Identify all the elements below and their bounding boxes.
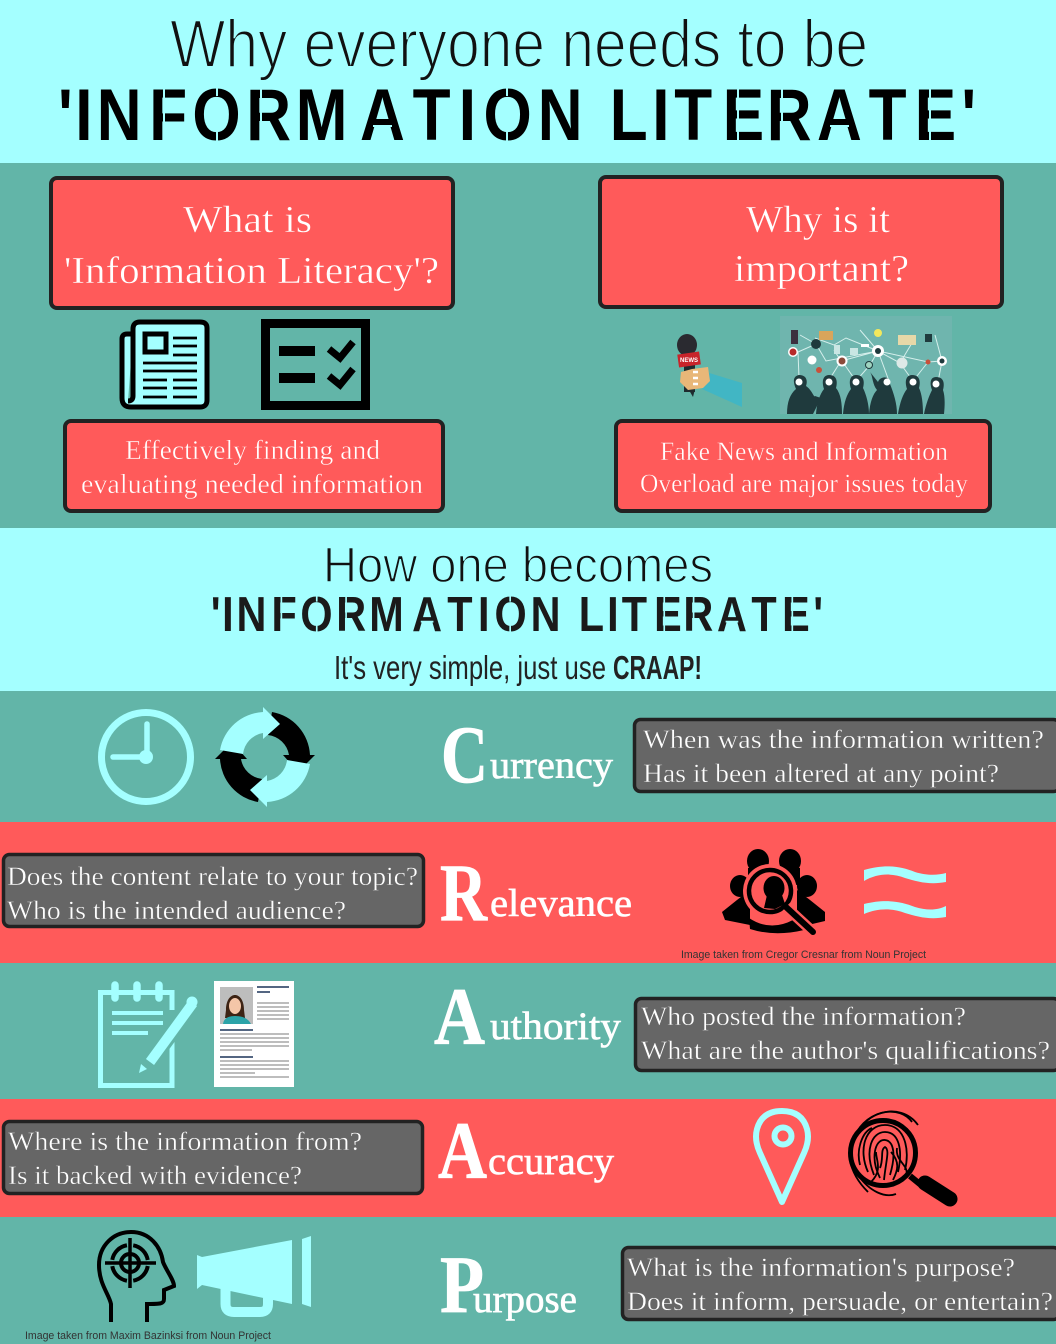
- credit: noun project: Image taken from Maxim Bazinksi from Noun Project: [25, 1330, 271, 1342]
- icon: location pin: [756, 1111, 808, 1202]
- heading: accuracy: ccuracy: [488, 1140, 615, 1183]
- credit: noun project: Image taken from Cregor Cresnar from Noun Project: [681, 949, 926, 961]
- heading: relevance: elevance: [490, 882, 632, 925]
- heading: accuracy: A: [438, 1105, 487, 1196]
- panel: fake news: [616, 421, 990, 511]
- callout: relevance questions: [4, 854, 424, 926]
- band: accuracy row background: [0, 1099, 1056, 1217]
- panel: fake news: Fake News and Information: [660, 437, 948, 466]
- heading: how one becomes: It's very simple, just use: [334, 649, 606, 686]
- callout: currency questions: When was the information written?: [643, 725, 1044, 754]
- icon: notepad and pencil: [100, 985, 198, 1086]
- heading: how one becomes: CRAAP!: [613, 649, 702, 686]
- callout: relevance questions: Does the content relate to your topic?: [7, 862, 418, 891]
- panel: fake news: Overload are major issues today: [640, 469, 968, 498]
- band: purpose row background: [0, 1217, 1056, 1344]
- callout: purpose questions: What is the information's purpose?: [627, 1253, 1015, 1282]
- panel: what is information literacy: 'Information Literacy'?: [64, 250, 439, 292]
- heading: currency: [441, 709, 614, 800]
- callout: accuracy questions: Where is the information from?: [8, 1127, 362, 1156]
- panel: what is information literacy: [51, 178, 453, 308]
- icon: megaphone: [197, 1236, 311, 1312]
- panel: effectively finding: [65, 421, 443, 511]
- heading: how one becomes: [211, 537, 823, 686]
- panel: why is it important: Why is it: [746, 199, 890, 241]
- callout: authority questions: [636, 998, 1056, 1070]
- icon: clock: [102, 712, 190, 802]
- panel: why is it important: important?: [734, 248, 909, 290]
- icon: crowd with information overload network: [780, 316, 952, 414]
- callout: purpose questions: [622, 1248, 1056, 1320]
- heading: how one becomes: 'INFORMATION LITERATE': [211, 587, 823, 642]
- row: authority: [100, 971, 1056, 1087]
- heading: relevance: [440, 847, 632, 938]
- icon: cycle arrows: [215, 707, 315, 807]
- icon: head with target: [99, 1232, 174, 1322]
- icon: approximately equal: [864, 866, 946, 918]
- icon: news microphone: [677, 334, 742, 407]
- icon: news microphone: NEWS: [680, 358, 698, 364]
- icon: newspaper: [122, 322, 207, 407]
- callout: accuracy questions: Is it backed with evidence?: [8, 1161, 302, 1190]
- band: title background: [0, 0, 1056, 163]
- heading: purpose: urpose: [473, 1278, 577, 1321]
- callout: purpose questions: Does it inform, persuade, or entertain?: [627, 1287, 1053, 1316]
- panel: what is information literacy: What is: [183, 199, 312, 241]
- icon: resume: [214, 981, 294, 1087]
- row: currency: [102, 707, 1056, 807]
- icon: fingerprint magnifier: [850, 1111, 950, 1199]
- callout: accuracy questions: [4, 1122, 422, 1194]
- callout: authority questions: What are the author's qualifications?: [641, 1036, 1050, 1065]
- band: relevance row background: [0, 822, 1056, 963]
- title: [58, 6, 976, 156]
- title: Why everyone needs to be: [170, 6, 868, 82]
- heading: purpose: [440, 1239, 577, 1330]
- band: currency row background: [0, 691, 1056, 822]
- icon: checklist: [266, 324, 366, 406]
- band: how-to heading background: [0, 528, 1056, 691]
- band: definition section background: [0, 163, 1056, 528]
- heading: authority: [434, 971, 622, 1062]
- heading: authority: uthority: [490, 1005, 622, 1048]
- callout: currency questions: [634, 720, 1056, 792]
- heading: accuracy: [438, 1105, 615, 1196]
- panel: effectively finding: evaluating needed information: [81, 469, 424, 499]
- heading: purpose: P: [440, 1239, 484, 1330]
- row: purpose: [25, 1232, 1056, 1342]
- band: authority row background: [0, 963, 1056, 1099]
- heading: currency: urrency: [490, 744, 614, 787]
- heading: authority: A: [434, 971, 485, 1062]
- heading: relevance: R: [440, 847, 488, 938]
- callout: relevance questions: Who is the intended audience?: [7, 896, 346, 925]
- panel: why is it important: [600, 177, 1002, 307]
- heading: currency: C: [441, 709, 488, 800]
- heading: how one becomes: How one becomes: [323, 537, 713, 593]
- callout: currency questions: Has it been altered at any point?: [643, 759, 999, 788]
- icon: audience search: [722, 849, 825, 933]
- panel: effectively finding: Effectively finding and: [125, 435, 381, 465]
- row: relevance: [4, 847, 946, 961]
- title: 'INFORMATION LITERATE': [58, 75, 976, 156]
- callout: authority questions: Who posted the information?: [641, 1002, 966, 1031]
- row: accuracy: [4, 1105, 950, 1202]
